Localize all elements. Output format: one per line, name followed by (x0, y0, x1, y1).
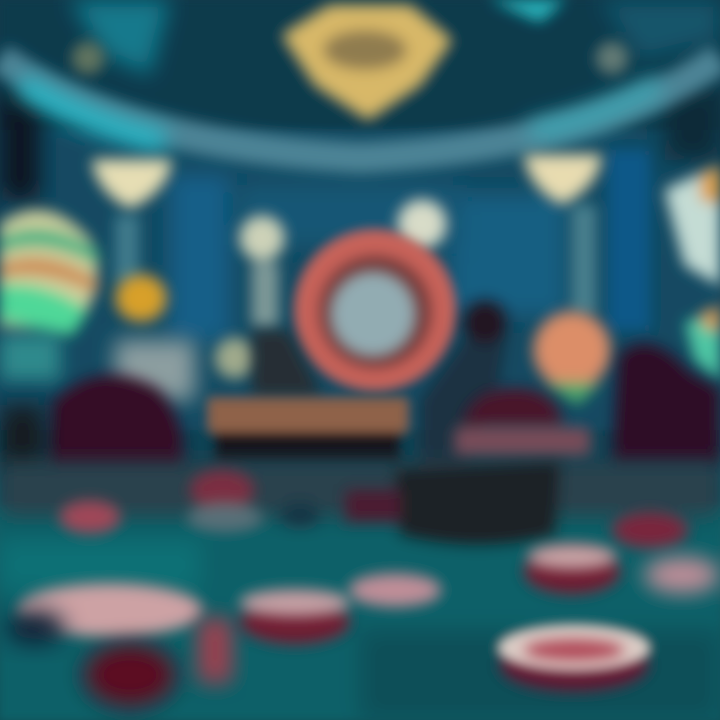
yellow ball (116, 275, 166, 321)
chip: right middle (524, 545, 720, 594)
ceiling (0, 0, 720, 135)
orange ball right (534, 312, 610, 405)
seated figure (252, 300, 508, 480)
chips: back row (60, 470, 688, 548)
right armchairs (455, 343, 720, 465)
dark base of table (345, 462, 560, 545)
gaming table (208, 398, 408, 462)
small globes (215, 200, 446, 378)
chandelier (282, 5, 452, 120)
right decorations (665, 165, 720, 380)
roulette wheel (295, 230, 455, 390)
lamp left (92, 160, 172, 208)
left striped decoration (0, 211, 98, 380)
wall (0, 90, 720, 430)
chip: right front (498, 625, 650, 691)
floor (0, 462, 720, 720)
lamp right (524, 155, 602, 204)
chips: left front pile (5, 574, 441, 707)
left armchair (0, 340, 195, 470)
arched cornice band (0, 58, 720, 158)
